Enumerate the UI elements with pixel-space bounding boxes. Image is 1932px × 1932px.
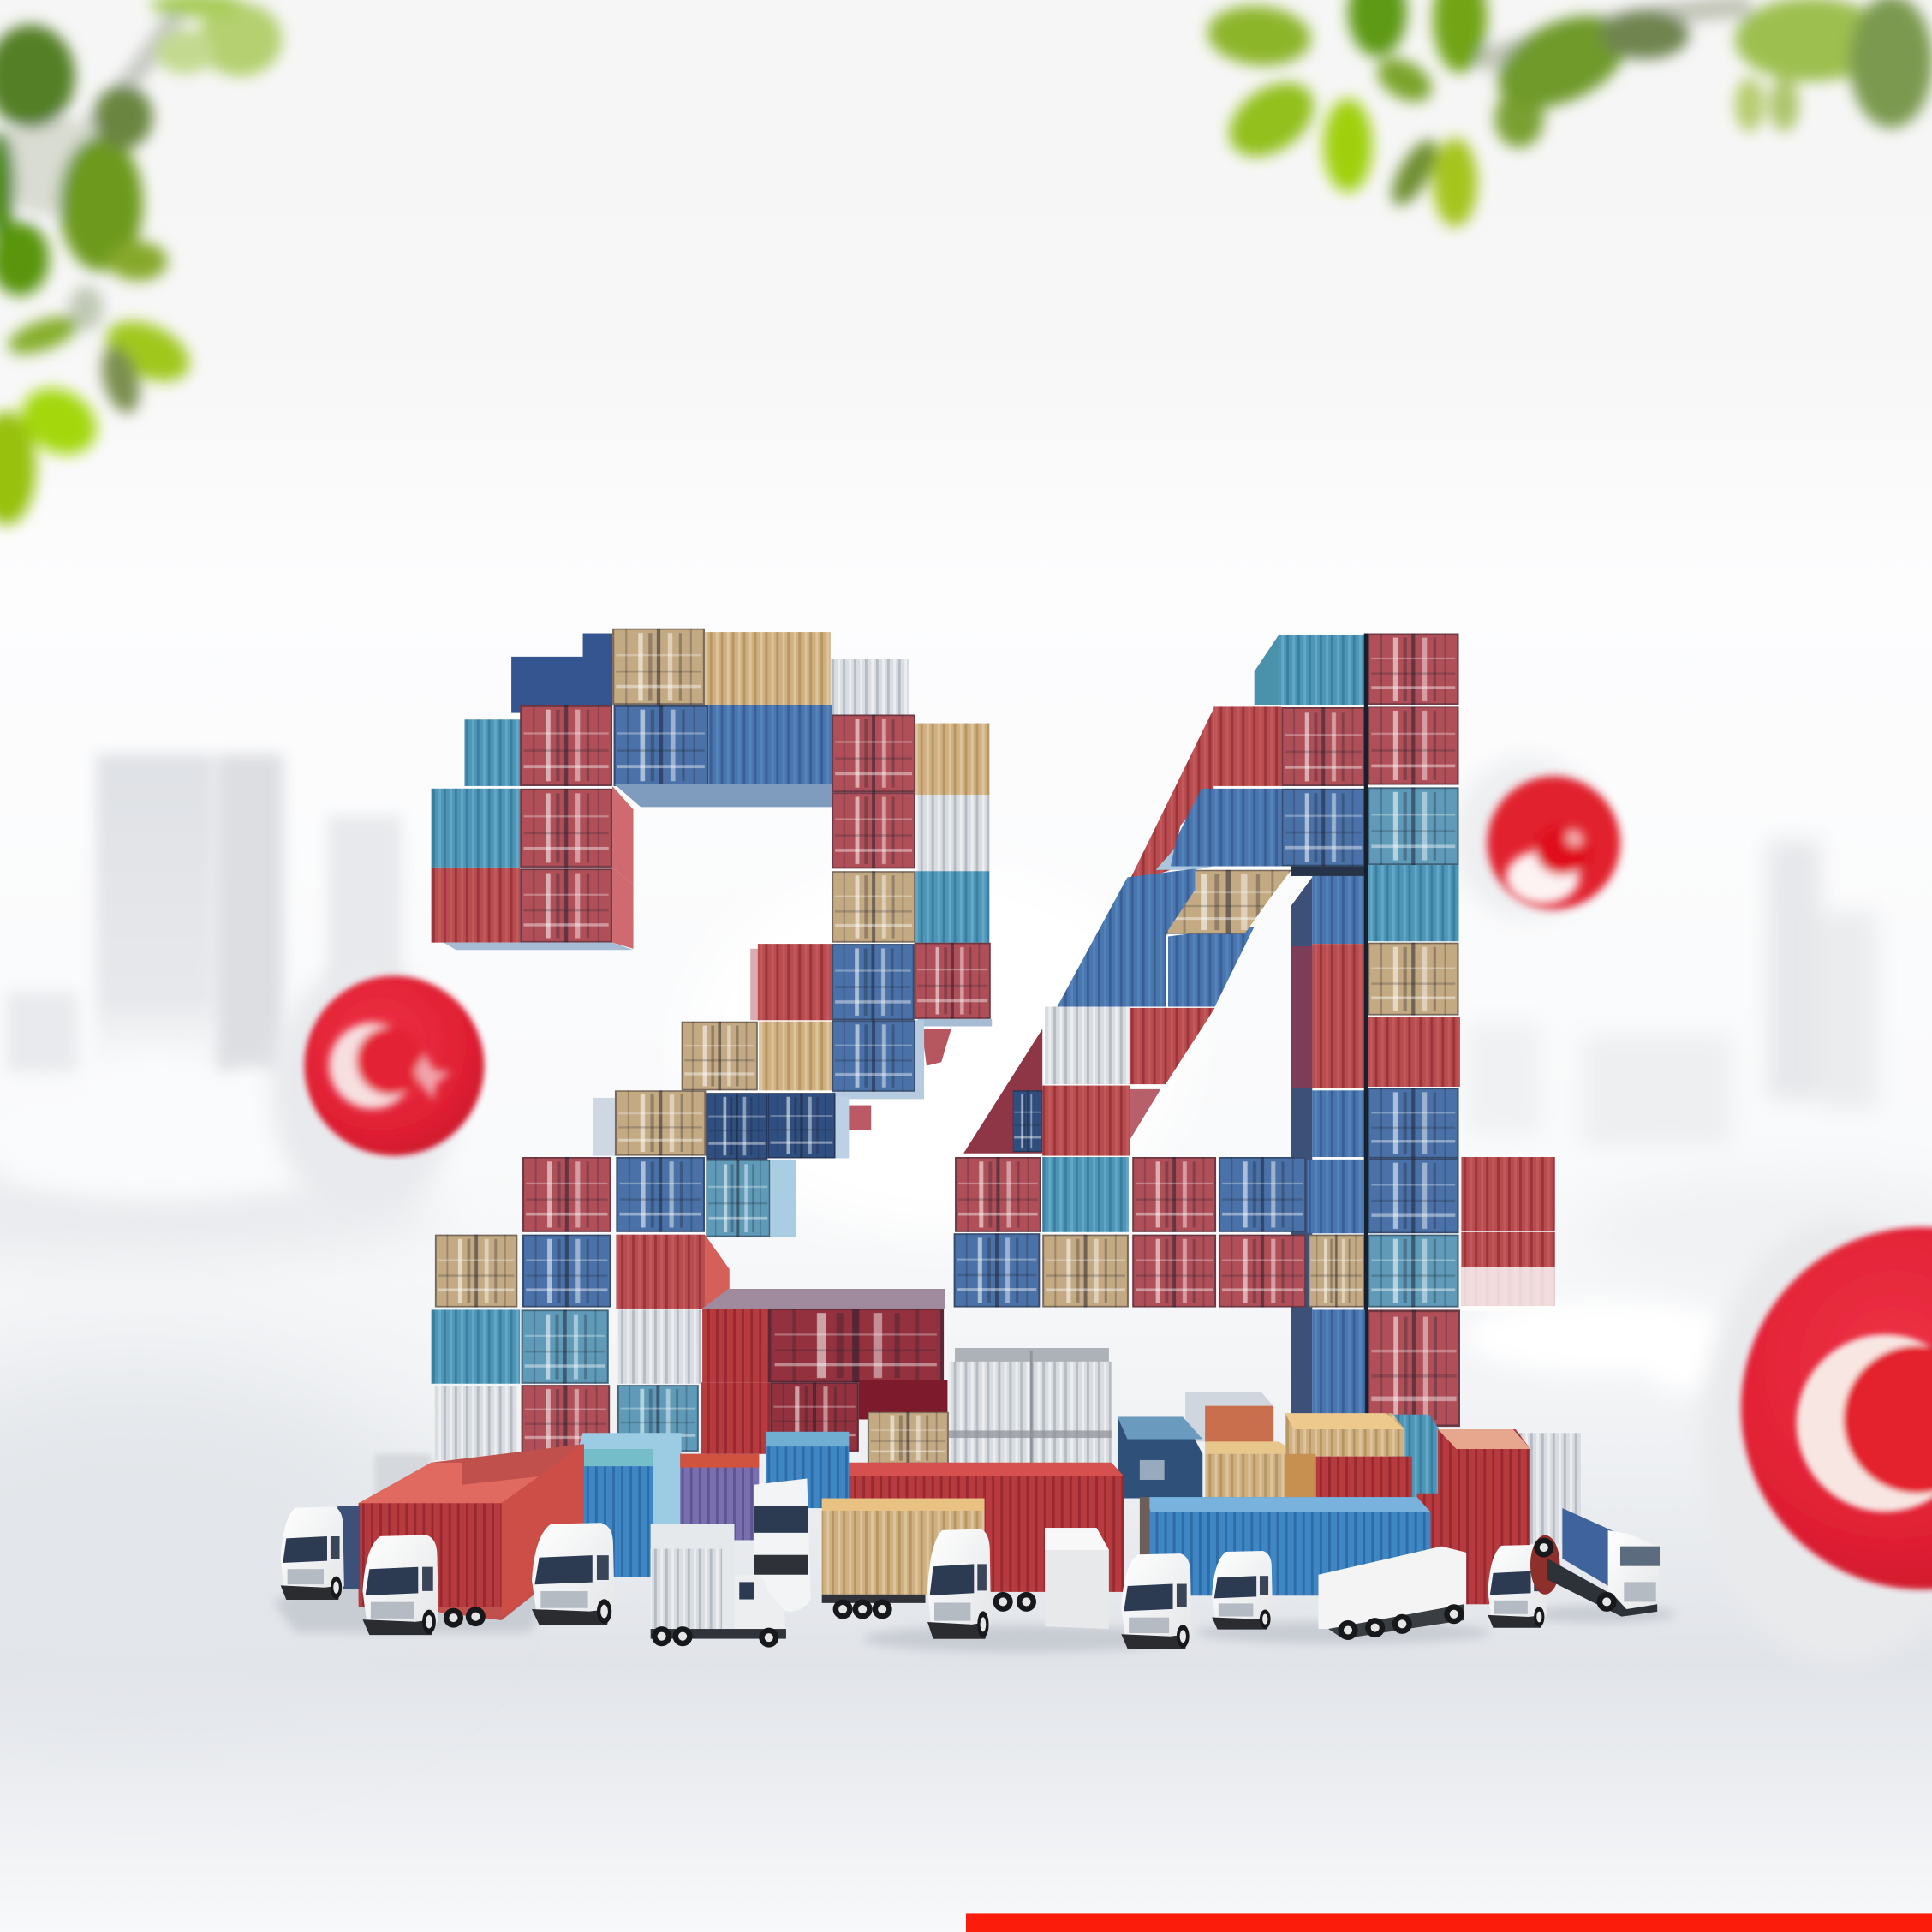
turkish flag sphere right edge bbox=[1741, 1227, 1932, 1589]
red container trailer bbox=[359, 1444, 584, 1620]
left cluster of containers bbox=[576, 1432, 849, 1577]
second row of digit 2 bbox=[520, 705, 989, 807]
middle diagonal of digit 2 bbox=[593, 943, 992, 1160]
third and fourth rows of digit 2 bbox=[432, 786, 989, 950]
halo behind right edge sphere bbox=[1701, 1219, 1932, 1663]
base of digit 4 bbox=[1312, 1309, 1460, 1427]
truck: white cab with red trailer bbox=[362, 1535, 486, 1635]
truck: cab in front of long blue container 1 bbox=[1121, 1553, 1192, 1649]
truck: far left cab bbox=[281, 1506, 360, 1600]
truck: white trailer bbox=[1318, 1547, 1466, 1640]
cloud humps on the left bbox=[0, 1056, 320, 1199]
blurred clouds bbox=[0, 862, 1932, 1294]
digit 2 made of containers bbox=[432, 629, 992, 1460]
long red container bbox=[835, 1463, 1124, 1592]
crescent bbox=[329, 1023, 451, 1109]
top rows of digit 4 bbox=[1166, 634, 1459, 934]
long blue container bbox=[1140, 1497, 1430, 1595]
lower body of digit 2 bbox=[432, 1157, 947, 1460]
cloud bank on the right bbox=[1466, 1300, 1738, 1392]
truck: side view at far right bbox=[1530, 1508, 1661, 1617]
soft grey fog on the left floor bbox=[0, 1368, 419, 1688]
blurred city skyline left bbox=[6, 754, 402, 1081]
truck: white cab with blue container bbox=[532, 1523, 615, 1625]
right cluster of containers bbox=[1118, 1392, 1581, 1604]
branch and leaves top right bbox=[1205, 0, 1932, 227]
top row of digit 2 bbox=[464, 629, 909, 786]
truck: tall white cab bbox=[754, 1479, 811, 1612]
halo behind left sphere bbox=[271, 965, 458, 1216]
turkish flag sphere top right bbox=[1488, 776, 1620, 909]
truck: cab at right bbox=[1488, 1545, 1547, 1628]
small tan container bbox=[868, 1412, 949, 1464]
digit 4 made of containers bbox=[954, 634, 1555, 1427]
ground shadow under trucks bbox=[273, 1555, 1676, 1652]
blurred grey object behind left truck bbox=[374, 1454, 432, 1496]
tan container on trailer bbox=[822, 1499, 985, 1619]
diagonal stroke of digit 4 bbox=[963, 708, 1255, 1154]
truck: cab in front of tan container bbox=[927, 1529, 991, 1639]
truck: cab in front of long blue container 2 bbox=[1212, 1551, 1273, 1630]
wheels under red container bbox=[993, 1592, 1036, 1612]
blurred city skyline right bbox=[1466, 840, 1876, 1146]
crossbar of digit 4 bbox=[954, 1157, 1555, 1311]
branch and leaves top left bbox=[0, 0, 282, 525]
white standalone container bbox=[1045, 1528, 1109, 1629]
red accent bar bbox=[966, 1913, 1932, 1932]
turkish flag sphere left bbox=[304, 976, 484, 1156]
large crescent bbox=[1797, 1334, 1932, 1512]
halo behind top right sphere bbox=[1452, 756, 1604, 919]
truck: white box truck bbox=[651, 1524, 786, 1648]
blurred crescent bbox=[1506, 826, 1589, 904]
rear white container stack bbox=[949, 1348, 1112, 1468]
vertical stroke of digit 4 bbox=[1042, 634, 1460, 1422]
